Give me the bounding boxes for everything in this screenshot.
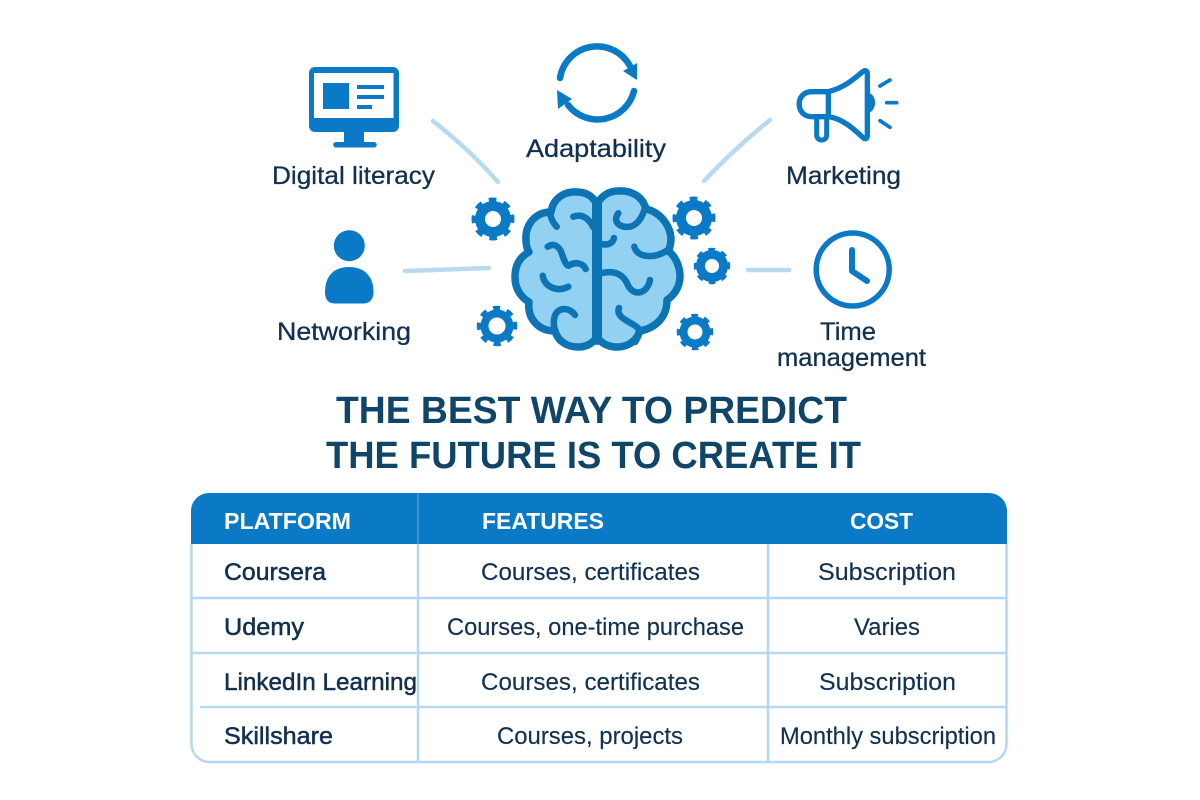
label: networking: Networking [277,318,411,346]
row: Coursera [224,559,956,586]
row: Coursera: Subscription [818,559,956,586]
label: time management: Time [820,318,876,346]
row: Skillshare: Courses, projects [497,723,683,750]
label: time management [777,318,926,372]
icon: megaphone [799,71,897,140]
icon: person [325,230,374,304]
row: Coursera: Courses, certificates [481,559,700,586]
row: Skillshare: Monthly subscription [780,723,996,750]
label: digital literacy: Digital literacy [272,162,436,190]
row: LinkedIn Learning: LinkedIn Learning [224,669,417,696]
table header: COST [850,508,913,534]
icon: brain [515,191,680,347]
table grid [191,544,1007,762]
table header: FEATURES [482,508,604,534]
table: learning platforms [191,493,1007,762]
row: Skillshare [224,723,996,750]
icon: monitor [309,67,399,148]
label: marketing: Marketing [786,162,901,190]
row: LinkedIn Learning [224,669,956,696]
row: Coursera: Coursera [224,559,327,586]
table header [191,493,1007,544]
title [326,390,861,477]
icon: adaptability arrows [557,46,637,119]
connector: networking to brain [405,268,489,271]
row: Udemy: Varies [854,614,920,641]
label: adaptability: Adaptability [526,135,667,163]
table header: PLATFORM [224,508,351,534]
title: THE FUTURE IS TO CREATE IT [326,435,861,477]
row: LinkedIn Learning: Courses, certificates [481,669,700,696]
label: time management: management [777,344,926,372]
icon: clock [816,233,889,306]
row: Udemy: Udemy [224,614,304,641]
row: LinkedIn Learning: Subscription [819,669,956,696]
title: THE BEST WAY TO PREDICT [336,390,847,432]
connector: time management to brain [748,268,789,272]
connector: marketing to brain [704,120,770,181]
connector: digital literacy to brain [433,121,498,182]
row: Udemy [224,614,920,641]
icon: gears [474,199,728,348]
row: Skillshare: Skillshare [224,723,333,750]
row: Udemy: Courses, one-time purchase [447,614,744,641]
